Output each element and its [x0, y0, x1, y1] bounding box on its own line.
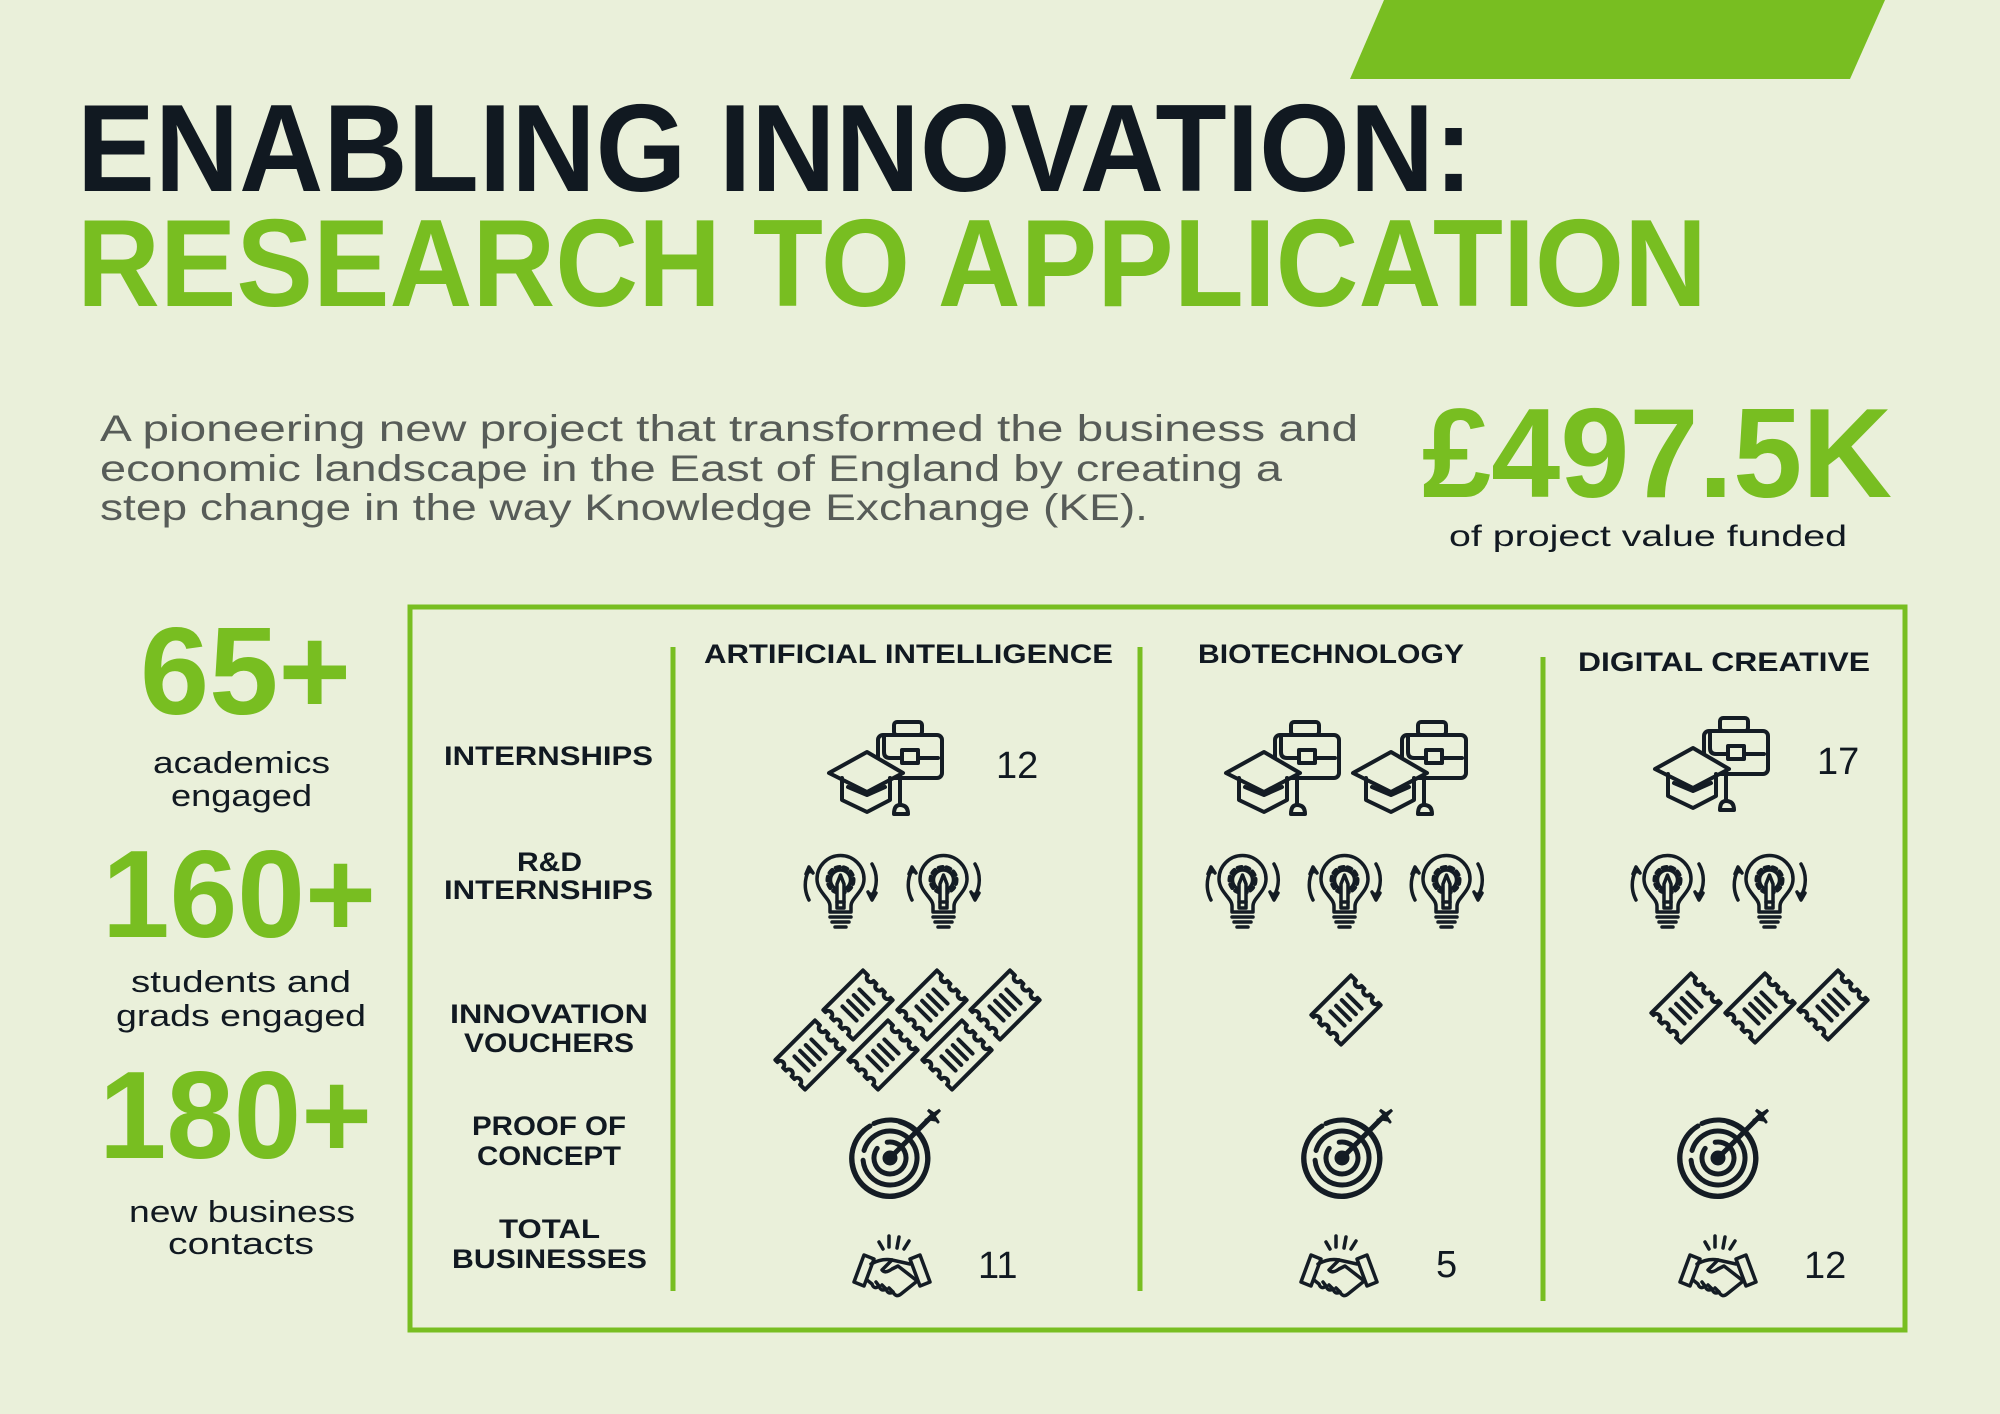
column headers: BIOTECHNOLOGY	[1198, 639, 1464, 669]
row: internships icons	[829, 718, 1768, 814]
stat: academics: 65+	[140, 603, 351, 741]
stat: students	[102, 826, 376, 1033]
row labels: INNOVATION	[450, 999, 648, 1029]
row labels: INTERNSHIPS	[444, 741, 653, 771]
headline stat: funding: of project value funded	[1449, 520, 1847, 553]
intro text: step change in the way Knowledge Exchange (KE).	[100, 487, 1148, 528]
numbers: 17	[1817, 741, 1859, 783]
row labels: BUSINESSES	[452, 1244, 647, 1274]
numbers: 12	[996, 745, 1038, 787]
numbers: 5	[1436, 1244, 1457, 1286]
headline stat: funding: £497.5K	[1422, 382, 1892, 524]
column headers: DIGITAL CREATIVE	[1578, 647, 1870, 677]
title	[77, 80, 1707, 333]
title: ENABLING INNOVATION:	[77, 80, 1473, 218]
stat: academics: academics	[153, 745, 330, 780]
title: RESEARCH TO APPLICATION	[77, 195, 1707, 333]
stat: students: 160+	[102, 826, 376, 964]
intro text: A pioneering new project that transformed the business and	[100, 408, 1358, 449]
stat: contacts: 180+	[99, 1047, 372, 1185]
row: innovation vouchers icons	[775, 970, 1868, 1090]
row labels: PROOF OF	[472, 1111, 626, 1141]
row: total businesses icons	[854, 1236, 1756, 1296]
stat: students: students and	[131, 964, 351, 999]
row labels: CONCEPT	[477, 1141, 622, 1171]
stat: contacts: contacts	[168, 1226, 314, 1261]
intro text	[100, 408, 1358, 528]
row labels: R&D	[517, 847, 582, 877]
column headers	[704, 639, 1870, 677]
row labels	[444, 741, 653, 1274]
row: proof of concept icons	[838, 1106, 1770, 1210]
decorative green banner	[1350, 0, 1885, 79]
row labels: VOUCHERS	[464, 1028, 634, 1058]
stat: students: grads engaged	[116, 998, 366, 1033]
intro text: economic landscape in the East of England by creating a	[100, 448, 1283, 489]
panel: activity table	[410, 607, 1905, 1330]
row: R&D internships icons	[805, 856, 1805, 927]
numbers: 11	[978, 1245, 1017, 1287]
column headers: ARTIFICIAL INTELLIGENCE	[704, 639, 1113, 669]
numbers: 12	[1804, 1245, 1846, 1287]
stat: academics: engaged	[171, 778, 312, 813]
numbers	[978, 741, 1859, 1287]
stat: academics	[140, 603, 351, 813]
stat: contacts: new business	[129, 1194, 355, 1229]
row labels: TOTAL	[499, 1214, 600, 1244]
row labels: INTERNSHIPS	[444, 875, 653, 905]
stat: contacts	[99, 1047, 372, 1261]
